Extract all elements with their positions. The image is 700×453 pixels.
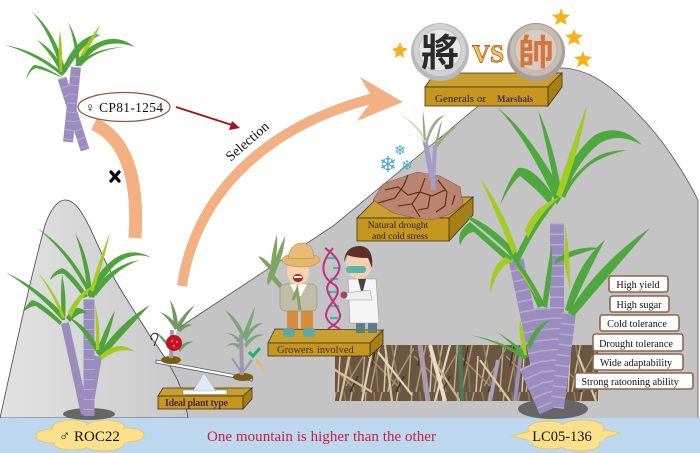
platform: natural drought and cold stress: and cold stress [372,232,428,242]
label: CP81-1254 oval [78,92,170,122]
platform: Ideal plant type: Ideal plant type [165,398,229,409]
caption: One mountain is higher than the other [207,429,436,445]
platform: Generals or Marshals [425,73,562,106]
icon: green check [249,348,260,356]
plant: stressed cane [397,110,457,190]
icon: General chess piece [411,22,469,81]
left mountain [0,200,188,418]
icon: Marshal chess piece [507,23,565,81]
icon: DNA helix [323,248,340,329]
plant: ideal balance plant [222,307,264,381]
icon: Marshal chess piece: 帥 [518,24,554,76]
trait: Drought tolerance: Drought tolerance [599,339,673,350]
cloud: ROC22 [36,420,144,451]
label: Selection: Selection [223,119,273,165]
trait: Wide adaptability: Wide adaptability [600,358,673,369]
plant: CP81-1254 cane [5,12,135,150]
platform: Growers involved: Growers [277,345,313,356]
icon: snowflakes: ❄ [379,153,397,178]
arrow: red pointer [176,107,240,130]
trait: High yield: High yield [616,280,660,291]
icon: General chess piece: 將 [421,22,459,77]
figure: grower [258,234,320,337]
cloud: ROC22: ♂ ROC22 [59,429,120,445]
icon: cracked soil [373,172,463,220]
arc: cross arrow [94,124,136,238]
arrow: selection sweep [182,77,403,286]
plant: ROC22 cane [5,228,152,420]
right mountain outline [177,68,698,418]
shadow [63,408,115,420]
platform: Generals or Marshals: Marshals [497,94,533,104]
platform: Growers involved: involved [317,345,354,356]
icon: snowflakes: ❄ [394,143,406,159]
balance scale [156,360,253,394]
trait: Strong ratooning ability: Strong ratooning ability [581,377,680,388]
icon: stars [392,8,592,67]
right mountain [170,68,698,418]
label: VS: VS [472,41,504,68]
cloud: LC05-136: LC05-136 [532,429,592,445]
trait: Cold tolerance: Cold tolerance [607,319,667,330]
icon: small yellow leaf [256,360,265,375]
platform: Growers involved [268,329,383,356]
cloud: LC05-136 [512,420,620,451]
icon: cross mark [111,172,119,181]
figure: scientist [340,246,379,333]
label: CP81-1254 oval: ♀ CP81-1254 [85,100,163,115]
plant: low balance plant with red disease mark [151,300,195,364]
icon: snowflakes: ❄ [401,158,413,174]
shadow [518,399,588,419]
plant: LC05-136 cane [459,105,650,419]
platform: Generals or Marshals: Generals or [435,93,486,105]
icon: snowflakes [379,143,413,178]
photo: cane field [335,345,598,401]
platform: Ideal plant type [158,388,252,409]
trait: High sugar: High sugar [616,300,662,311]
traits list [575,276,693,389]
platform: natural drought and cold stress: Natural drought [368,221,429,231]
water band [0,418,700,453]
platform: natural drought and cold stress [357,197,473,242]
